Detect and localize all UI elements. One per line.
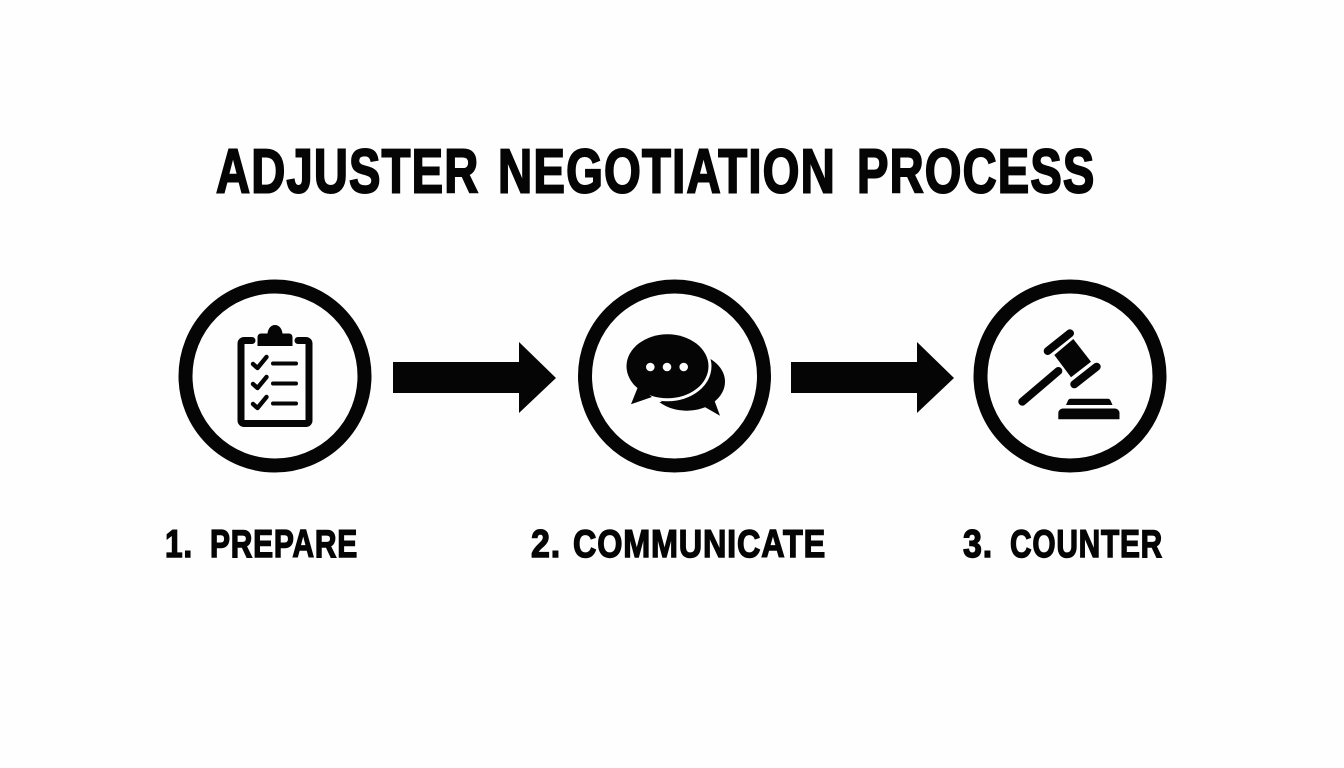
step 1: prepare: [165, 286, 364, 566]
title: NEGOTIATION: [498, 137, 836, 206]
arrow: communicate to counter: [791, 342, 954, 413]
label: 1. prepare: 1.: [165, 523, 193, 566]
title: ADJUSTER: [216, 137, 480, 206]
label: 2. communicate: COMMUNICATE: [573, 523, 826, 566]
title: [216, 137, 1096, 206]
arrow: prepare to communicate: [393, 342, 556, 413]
icon ring: prepare: [186, 286, 364, 466]
step 3: counter: [963, 286, 1163, 566]
icon ring: counter: [980, 286, 1160, 466]
icon ring: communicate: [585, 286, 764, 466]
title: PROCESS: [857, 137, 1096, 206]
label: 3. counter: COUNTER: [1010, 523, 1163, 566]
icon: gavel: [1022, 333, 1120, 419]
icon: speech bubbles: [624, 331, 725, 416]
label: 2. communicate: 2.: [531, 523, 561, 566]
label: 3. counter: 3.: [963, 523, 993, 566]
label: 1. prepare: [165, 523, 358, 566]
icon: clipboard checklist: [241, 325, 309, 424]
label: 1. prepare: PREPARE: [210, 523, 358, 566]
label: 3. counter: [963, 523, 1163, 566]
step 2: communicate: [531, 286, 826, 566]
